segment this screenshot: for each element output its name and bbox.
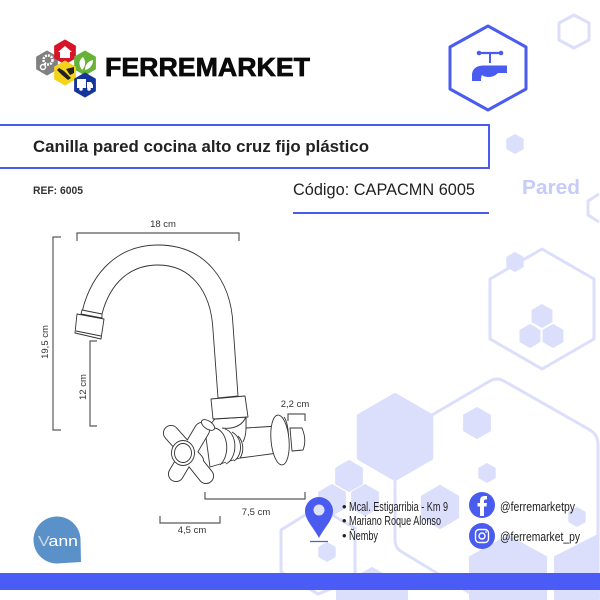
footer bar [0, 573, 600, 590]
faucet aerator [75, 310, 104, 339]
store addresses: • [342, 513, 347, 528]
dimension: 7,5 cm: 7,5 cm [242, 507, 270, 518]
logo: Vann [34, 516, 81, 564]
icon: location pin [305, 497, 333, 542]
dimension: 18 cm [77, 219, 239, 241]
icon: instagram [469, 523, 495, 549]
store addresses: Mcal. Estigarribia - Km 9 [349, 499, 448, 514]
dimension: 18 cm: 18 cm [150, 219, 176, 230]
product title box [0, 125, 489, 168]
category label: Pared [522, 177, 580, 199]
faucet technical drawing [75, 245, 305, 476]
store addresses: • [342, 528, 347, 543]
dimension: 4,5 cm [160, 516, 220, 536]
faucet spout [82, 245, 238, 398]
instagram handle: @ferremarket_py [500, 529, 580, 544]
product code: Código: CAPACMN 6005 [293, 180, 475, 199]
dimension: 19,5 cm [40, 237, 61, 430]
store addresses: • [342, 499, 347, 514]
logo hexagon icons [37, 40, 95, 97]
store addresses [342, 499, 448, 543]
store addresses: Ñemby [349, 528, 378, 543]
dimension: 19,5 cm: 19,5 cm [40, 325, 51, 359]
brand logo [37, 40, 310, 97]
dimension: 12 cm: 12 cm [78, 374, 89, 400]
dimension: 4,5 cm: 4,5 cm [178, 525, 206, 536]
dimension: 2,2 cm: 2,2 cm [281, 399, 309, 410]
background hexagon pattern [281, 15, 599, 599]
facebook handle: @ferremarketpy [500, 499, 575, 514]
logo: Vann: Vann [38, 533, 78, 550]
logo wordmark: FERREMARKET [105, 52, 310, 82]
cross handle [171, 417, 216, 476]
dimension: 12 cm [78, 341, 97, 426]
icon: facebook [469, 492, 495, 518]
icon: faucet in hexagon [450, 26, 526, 110]
faucet body [205, 396, 305, 467]
reference number: REF: 6005 [33, 185, 83, 197]
product title: Canilla pared cocina alto cruz fijo plástico [33, 137, 369, 156]
dimension: 2,2 cm [281, 399, 309, 421]
store addresses: Mariano Roque Alonso [349, 513, 441, 528]
dimension: 7,5 cm [205, 492, 305, 518]
